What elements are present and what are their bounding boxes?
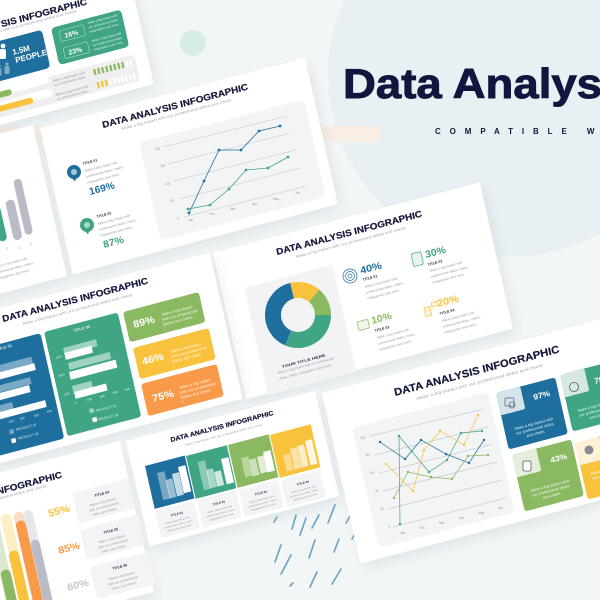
slide heading: DATA ANALYSIS INFOGRAPHIC [101, 82, 249, 130]
icon: small people [0, 62, 10, 76]
info card 04: Make a big impact with [291, 485, 317, 494]
peach band [0, 126, 380, 142]
slide background [40, 58, 338, 274]
slide background [0, 125, 67, 346]
series green [188, 157, 288, 209]
card title 05: TITLE 05 [103, 527, 118, 535]
info card 02: TITLE 02 [212, 499, 226, 507]
pill track 1 [0, 75, 50, 101]
slide background [322, 311, 600, 564]
stat 55%: 55% [47, 504, 71, 520]
stat 16 description: Make a big impact with [87, 13, 118, 25]
column panel light green [228, 434, 278, 488]
card title 06 [90, 552, 155, 599]
axis labels [8, 409, 52, 424]
people count: 1.5M [11, 44, 31, 57]
category labels [55, 354, 71, 397]
yellow progress bar [0, 97, 34, 117]
card 89%: 89% [132, 315, 156, 331]
card 97%: our professional slides [515, 421, 554, 436]
card 75% [141, 364, 224, 416]
capsule orange [14, 512, 43, 600]
icon: blue pin [67, 165, 81, 182]
stat box 16% [59, 25, 86, 42]
text 03: professional slides, charts, [378, 332, 416, 346]
decorative dashes [274, 505, 356, 587]
slide background [0, 441, 154, 600]
card 97%: and charts. [526, 428, 546, 438]
axis labels: 30K [33, 413, 39, 418]
stat 10%: 10% [370, 311, 393, 327]
slide background [213, 182, 513, 399]
slide subheading: Make a big impact with our professional slides and charts [22, 293, 133, 326]
x axis labels: Mar [230, 207, 236, 211]
stat 85%: 85% [57, 541, 81, 557]
slide heading: DATA ANALYSIS INFOGRAPHIC [170, 410, 275, 444]
y axis labels: 50 [170, 199, 174, 203]
icon: 40% ring [343, 269, 357, 283]
slide subheading: Make a big impact with our professional slides and charts [184, 422, 263, 447]
card 43% [512, 439, 584, 512]
green ticks [94, 62, 124, 75]
axis labels: 10K [86, 397, 92, 402]
x axis labels: Feb [419, 526, 425, 530]
slide: capsule column chart [0, 125, 67, 346]
category labels: MAY [58, 372, 65, 378]
text 01: infographics and more. [87, 172, 120, 185]
y axis labels: 150 [160, 164, 166, 168]
slide heading: DATA ANALYSIS INFOGRAPHIC [1, 276, 149, 324]
card title 05: with our professional [98, 538, 128, 550]
slide subheading: Make a big impact with our professional slides and charts [416, 363, 543, 401]
info card 04: professional slides, charts, [290, 488, 320, 499]
capsule gray [24, 510, 52, 600]
bars [0, 357, 47, 423]
card 89%: Make a big impact [161, 304, 194, 317]
category labels: APR [55, 354, 63, 360]
card title 04: with our professional [89, 501, 119, 513]
title 01: TITLE 01 [362, 274, 378, 282]
people label: PEOPLE [14, 48, 49, 65]
info card 01 [155, 501, 200, 538]
empty ticks row 2 [110, 73, 135, 85]
text 02: Make a big impact with [429, 260, 463, 273]
icon tile [560, 369, 589, 397]
text 04: professional slides, charts, [443, 315, 481, 329]
column panel green [186, 445, 236, 499]
slide: horizontal bars and cards [0, 253, 243, 470]
donut text: slides, charts, infographics and more [279, 363, 332, 381]
series blue [189, 126, 280, 213]
icon [523, 461, 531, 471]
slide background [0, 0, 154, 154]
column panel blue [145, 455, 194, 509]
axis labels: 20K [8, 419, 14, 424]
markers green [187, 156, 289, 210]
card title 04: TITLE 04 [94, 490, 109, 498]
category labels: APR [63, 391, 71, 397]
info card 03: infographics and more. [251, 503, 277, 512]
stat 40%: 40% [359, 261, 383, 277]
slide heading: DATA ANALYSIS INFOGRAPHIC [275, 209, 423, 257]
y axis labels: 0 [177, 217, 179, 221]
card 75%: slides and charts. [181, 387, 212, 400]
y axis labels: 100 [165, 182, 171, 186]
donut chart [273, 290, 323, 340]
info card 04: TITLE 04 [296, 479, 310, 487]
panel: people [0, 30, 50, 87]
y axis labels: 60 [370, 471, 374, 475]
text 04: Make a big impact with [441, 310, 475, 323]
slide background [0, 253, 243, 470]
icon: person [0, 44, 6, 59]
title 02: TITLE 02 [96, 211, 112, 219]
axis labels: 40K [124, 387, 130, 392]
stat 23 description: Make a big impact with [91, 31, 122, 43]
card 46%: slides and charts. [172, 351, 203, 364]
progress text 1: our professional slides [53, 75, 86, 87]
slide background [126, 391, 339, 546]
slide: donut chart [213, 182, 513, 399]
card 75%: with our professional [180, 381, 216, 395]
info card 01: TITLE 01 [170, 510, 184, 518]
stat 23 description: our professional slides [92, 36, 123, 47]
text 02: infographics and more. [432, 272, 465, 285]
axis labels: 40K [46, 409, 52, 414]
card 89%: with our professional [162, 308, 198, 322]
card yellow [575, 427, 600, 500]
card 43%: Make a big impact with [530, 478, 569, 493]
donut text: Make a big impact with our professional [277, 356, 335, 375]
progress text 2: our professional slides [56, 89, 89, 101]
info card 01: Make a big impact with [165, 516, 191, 525]
title 04: TITLE 04 [439, 308, 455, 316]
text 03: Make a big impact with [376, 327, 410, 340]
progress text 2: Make a big impact with [55, 84, 89, 97]
green column [0, 206, 7, 242]
card 75%: Make a big impact [179, 377, 212, 390]
x axis labels [188, 191, 300, 222]
panel: title 01 chart [0, 333, 64, 460]
stat 16 description: infographics and more [89, 22, 119, 34]
icon [570, 382, 578, 392]
bars [63, 339, 117, 399]
text 01: professional slides, charts, [86, 165, 124, 179]
icon tile [575, 437, 600, 465]
card title 04: Make a big impact [89, 497, 116, 507]
card 46%: 46% [141, 352, 165, 368]
stat 23%: 23% [68, 46, 84, 57]
icon tile [512, 449, 541, 477]
axis label 4: 4 [30, 242, 32, 246]
icon [505, 398, 515, 408]
icon: 20% speech [424, 301, 438, 317]
axis labels: 20K [99, 394, 105, 399]
card title 06: Make a big impact [108, 571, 135, 581]
legend [9, 423, 39, 443]
text 04: infographics and more. [444, 322, 477, 335]
y axis labels: 20 [380, 507, 384, 511]
info card 03 [239, 480, 284, 517]
y axis labels: 200 [155, 147, 161, 151]
stat 16 description: our professional slides [88, 18, 119, 29]
card title 04: slides and charts. [92, 507, 118, 517]
capsule green [0, 516, 17, 600]
info card 02: professional slides, charts, [206, 508, 236, 519]
legend: PRODUCT 01 [15, 423, 37, 432]
panel: percentages [51, 9, 129, 65]
y axis labels: 0 [388, 525, 390, 529]
background circle [328, 0, 600, 257]
panel: progress [0, 54, 140, 129]
card 97%: 97% [532, 389, 551, 402]
text 02: professional slides, charts, [99, 218, 137, 232]
card 75%: 75% [151, 389, 175, 405]
axis labels: 30K [19, 416, 25, 421]
info card 01: infographics and more. [167, 524, 193, 533]
series teal [398, 430, 483, 525]
slide subheading: Make a big impact with our professional slides and charts [295, 226, 406, 259]
y axis labels: 80 [366, 453, 370, 457]
card 97% [496, 377, 568, 450]
icon [584, 446, 594, 454]
legend: PRODUCT 01 [95, 404, 117, 413]
panel title: TITLE 02 [73, 324, 91, 333]
legend: PRODUCT 02 [17, 432, 39, 441]
card 46%: Make a big impact [170, 341, 203, 354]
info card 02: infographics and more. [209, 513, 235, 522]
icon: green pin [80, 218, 94, 234]
slide: multi line chart [322, 311, 600, 564]
x axis labels: Apr [459, 516, 465, 520]
x axis labels: May [478, 511, 484, 515]
text 01: professional slides, charts, [366, 281, 404, 295]
stat 169%: 169% [88, 181, 116, 198]
info card 04 [281, 470, 326, 507]
card 43%: our professional slides [531, 483, 570, 498]
card title 05: slides and charts. [101, 544, 127, 554]
gray column 2 [13, 178, 33, 236]
card 89% [123, 292, 205, 342]
card 97%: Make a big impact with [514, 416, 553, 431]
card title 06: slides and charts. [111, 581, 137, 591]
x axis labels: Jan [400, 531, 405, 535]
y axis labels [360, 436, 390, 529]
info card 03: Make a big impact with [249, 495, 275, 504]
card 46%: with our professional [171, 345, 207, 359]
stat 16%: 16% [64, 29, 80, 40]
axis labels: 2 [6, 247, 8, 251]
x axis labels: Jan [188, 218, 193, 222]
title 02: TITLE 02 [427, 259, 443, 267]
text 01: Make a big impact with [84, 160, 118, 173]
stat 30%: 30% [424, 245, 447, 261]
card 89%: slides and charts. [163, 314, 194, 327]
markers blue [188, 125, 281, 214]
axis labels [74, 387, 130, 405]
info card 01: professional slides, charts, [164, 519, 194, 530]
progress text 1: Make a big impact with [52, 70, 86, 83]
card 43%: and charts. [542, 490, 562, 500]
text 01: Make a big impact with [364, 276, 398, 289]
icon: 30% document [411, 251, 424, 267]
series light green [393, 454, 489, 499]
slide subheading: Make a big impact with our professional slides and charts [121, 98, 232, 131]
y axis labels [155, 147, 179, 221]
axis label 3: 3 [18, 246, 20, 250]
chart panel [352, 392, 515, 548]
card title 06: with our professional [108, 575, 138, 587]
stat 60%: 60% [66, 578, 90, 594]
stat box 23% [63, 42, 90, 59]
slide: capsule progress [0, 441, 155, 600]
x axis labels: Apr [252, 202, 258, 206]
title 01: TITLE 01 [82, 158, 98, 166]
info card 02: Make a big impact with [207, 505, 233, 514]
donut panel [244, 265, 356, 395]
column panel yellow [270, 424, 320, 478]
x axis labels: Mar [439, 521, 445, 525]
x axis labels: Feb [209, 212, 215, 216]
icon tile [496, 387, 525, 415]
stat 87%: 87% [102, 235, 125, 251]
stat 20%: 20% [436, 294, 460, 310]
line chart [155, 116, 306, 222]
donut title: YOUR TITLE HERE [281, 353, 327, 369]
x axis labels: Jun [498, 506, 503, 510]
panel: title 02 chart [44, 312, 141, 436]
chart panel [139, 99, 326, 240]
slide: people statistics [0, 0, 154, 154]
capsule yellow [1, 514, 30, 600]
pill track 2 [0, 88, 54, 115]
series yellow [385, 414, 479, 492]
card title 04 [72, 478, 135, 523]
icon: 10% monitor [357, 319, 370, 331]
text 02: professional slides, charts, [431, 265, 469, 279]
stat 23 description: infographics and more [93, 40, 123, 52]
axis labels: 30K [112, 390, 118, 395]
multi line chart [360, 409, 506, 535]
info card 03: TITLE 03 [254, 489, 268, 497]
text 02: infographics and more. [100, 225, 133, 238]
yellow ticks [98, 80, 107, 88]
gray column 1 [5, 199, 23, 241]
legend [89, 404, 119, 422]
info card 02 [197, 490, 242, 527]
text 01: infographics and more. [367, 288, 400, 301]
info card 04: infographics and more. [293, 493, 319, 502]
small mint circle [180, 30, 206, 56]
card 43%: 43% [549, 452, 568, 465]
legend: PRODUCT 02 [97, 413, 119, 422]
x axis labels: May [273, 197, 279, 201]
green progress bar [0, 89, 12, 103]
series blue [379, 439, 485, 464]
empty ticks row 1 [126, 60, 132, 67]
slide heading: DATA ANALYSIS INFOGRAPHIC [393, 343, 561, 399]
text 02: Make a big impact with [97, 213, 131, 226]
slide: four column charts [126, 391, 339, 546]
text 03: infographics and more. [379, 339, 412, 352]
card 46% [133, 328, 216, 379]
x axis labels: Jun [295, 191, 300, 195]
y axis labels: 40 [375, 489, 379, 493]
x axis labels [400, 506, 503, 535]
y axis labels: 100 [360, 436, 366, 440]
slide: line chart [40, 58, 338, 274]
axis labels: 0 [74, 401, 77, 405]
title 03: TITLE 03 [374, 325, 390, 333]
card title 05: Make a big impact [98, 534, 125, 544]
info card 03: professional slides, charts, [248, 498, 278, 509]
card title 05 [80, 515, 145, 560]
card title 06: TITLE 06 [112, 563, 127, 571]
card 7x% [560, 359, 600, 432]
